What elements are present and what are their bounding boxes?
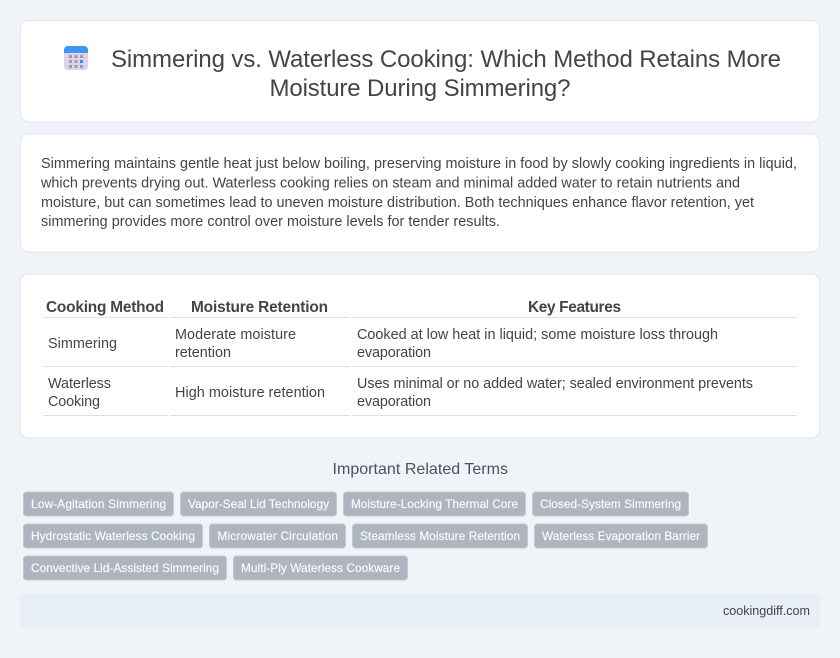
- footer: [20, 594, 820, 628]
- tag: [344, 492, 526, 516]
- table row: waterless cooking: Cooking: [48, 394, 100, 410]
- tag: Microwater Circulation: [218, 529, 338, 543]
- tag: Steamless Moisture Retention: [360, 529, 520, 543]
- text block: summary: moisture, but can sometimes lead to uneven moisture distribution. Both techniques enhance flavor retention, yet: [41, 195, 754, 211]
- icon: calendar: [64, 46, 88, 70]
- tag: Closed-System Simmering: [540, 497, 681, 511]
- table row: simmering: [48, 327, 718, 361]
- table row: waterless cooking: Uses minimal or no added water; sealed environment prevents: [357, 376, 753, 392]
- title: Moisture During Simmering?: [270, 75, 570, 102]
- footer source text: cookingdiff.com: [723, 604, 810, 618]
- table header: Key Features: [528, 299, 621, 316]
- tag: Hydrostatic Waterless Cooking: [31, 529, 195, 543]
- tag: Waterless Evaporation Barrier: [542, 529, 700, 543]
- table row: simmering: Simmering: [48, 336, 117, 352]
- tag: [534, 524, 708, 548]
- table row: simmering: Cooked at low heat in liquid; some moisture loss through: [357, 327, 718, 343]
- tag: Convective Lid-Assisted Simmering: [31, 561, 219, 575]
- text block: summary: Simmering maintains gentle heat just below boiling, preserving moisture in food by slowly cooking ingredients in liquid,: [41, 156, 797, 172]
- table row: waterless cooking: evaporation: [357, 394, 431, 410]
- table row: simmering: Moderate moisture: [175, 327, 296, 343]
- tag: [532, 492, 688, 516]
- tag: Vapor-Seal Lid Technology: [188, 497, 329, 511]
- tag: Low-Agitation Simmering: [31, 497, 166, 511]
- table row: waterless cooking: High moisture retention: [175, 385, 325, 401]
- tag: [210, 524, 346, 548]
- tag: Multi-Ply Waterless Cookware: [241, 561, 400, 575]
- table row: simmering: evaporation: [357, 345, 431, 361]
- title: Simmering vs. Waterless Cooking: Which Method Retains More: [111, 46, 781, 73]
- tag: [24, 492, 174, 516]
- text block: summary: [40, 156, 797, 230]
- table header: Moisture Retention: [191, 299, 328, 316]
- text block: summary: which prevents drying out. Waterless cooking relies on steam and minimal added water to retain nutrients and: [40, 176, 740, 192]
- table row: waterless cooking: Waterless: [48, 376, 111, 392]
- tag: Moisture-Locking Thermal Core: [351, 497, 518, 511]
- table row: waterless cooking: [48, 376, 753, 410]
- tags: related terms: [24, 492, 708, 580]
- tag: [24, 556, 226, 580]
- title: [111, 46, 781, 102]
- tag: [180, 492, 336, 516]
- tag: [352, 524, 528, 548]
- text block: summary: simmering provides more control over moisture levels for tender results.: [41, 214, 500, 230]
- heading: related terms: Important Related Terms: [332, 461, 508, 478]
- table row: simmering: retention: [175, 345, 231, 361]
- tag: [234, 556, 408, 580]
- tag: [24, 524, 202, 548]
- table header: Cooking Method: [46, 299, 164, 316]
- panel: comparison table: [20, 274, 820, 438]
- panel: summary paragraph: [20, 134, 820, 252]
- panel: title header: [20, 20, 820, 122]
- table header: [46, 299, 621, 316]
